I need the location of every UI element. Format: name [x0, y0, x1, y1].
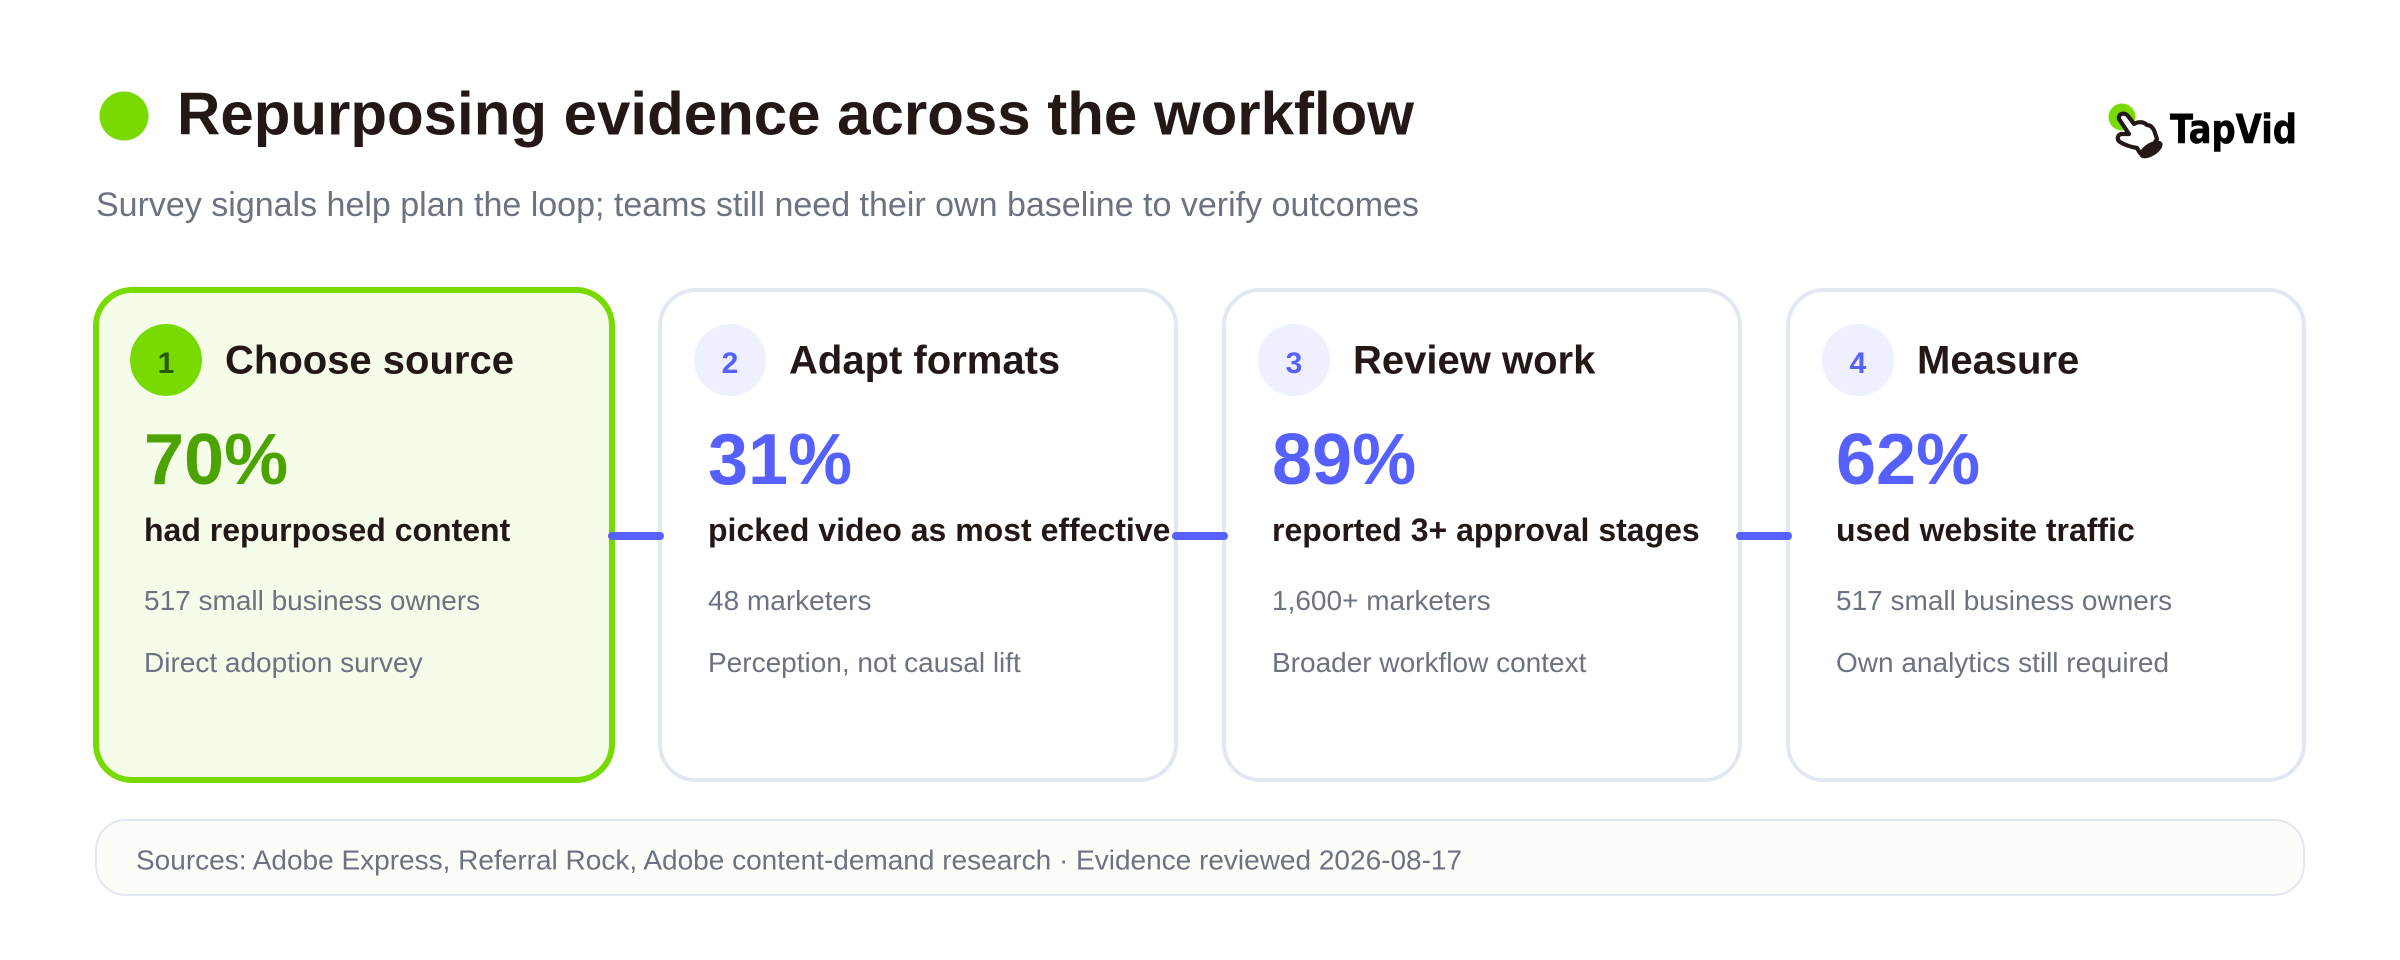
stat: 62%: [1836, 420, 1980, 500]
step title: Choose source: [225, 338, 514, 382]
step badge 3: 3: [1286, 347, 1302, 380]
stat label: picked video as most effective: [708, 512, 1170, 548]
stat label: used website traffic: [1836, 512, 2135, 548]
sample: 517 small business owners: [1836, 585, 2172, 616]
stat: 70%: [144, 420, 288, 500]
note: Direct adoption survey: [144, 647, 423, 678]
logo wordmark: TapVid: [2170, 107, 2297, 153]
step badge 4: [1822, 324, 1894, 396]
panel: step 4 measure: [1788, 290, 2304, 780]
stat: 89%: [1272, 420, 1416, 500]
header: [96, 80, 1419, 224]
stat label: had repurposed content: [144, 512, 511, 548]
footer: sources: Sources: Adobe Express, Referral Rock, Adobe content-demand research · Evidence reviewed 2026-08-17: [136, 844, 1462, 876]
arrow: connector 3 to 4: [1736, 532, 1792, 540]
stat label: reported 3+ approval stages: [1272, 512, 1700, 548]
logo: TapVid: [2108, 104, 2297, 162]
step title: Measure: [1917, 338, 2079, 382]
stat: 31%: [708, 420, 852, 500]
footer: sources: [96, 820, 2304, 895]
sample: 1,600+ marketers: [1272, 585, 1491, 616]
step badge 4: 4: [1850, 347, 1867, 380]
step badge 2: [694, 324, 766, 396]
icon: green tap dot: [2108, 104, 2136, 130]
icon: pointing hand: [2118, 114, 2165, 162]
panel: step 2 adapt formats: [660, 290, 1176, 780]
step title: Review work: [1353, 338, 1596, 382]
panel: step 1 choose source: [96, 290, 612, 780]
note: Perception, not causal lift: [708, 647, 1021, 678]
subtitle: Survey signals help plan the loop; teams still need their own baseline to verify outcomes: [96, 186, 1419, 224]
arrow: connector 2 to 3: [1172, 532, 1228, 540]
step badge 2: 2: [722, 347, 738, 380]
title: Repurposing evidence across the workflow: [177, 80, 1414, 148]
sample: 48 marketers: [708, 585, 871, 616]
panel: step 3 review work: [1224, 290, 1740, 780]
step badge 1: 1: [158, 347, 174, 380]
sample: 517 small business owners: [144, 585, 480, 616]
arrow: connector 1 to 2: [608, 532, 664, 540]
step title: Adapt formats: [789, 338, 1060, 382]
step badge 3: [1258, 324, 1330, 396]
step badge 1: [130, 324, 202, 396]
note: Own analytics still required: [1836, 647, 2169, 678]
note: Broader workflow context: [1272, 647, 1587, 678]
icon: title dot: [100, 92, 148, 140]
